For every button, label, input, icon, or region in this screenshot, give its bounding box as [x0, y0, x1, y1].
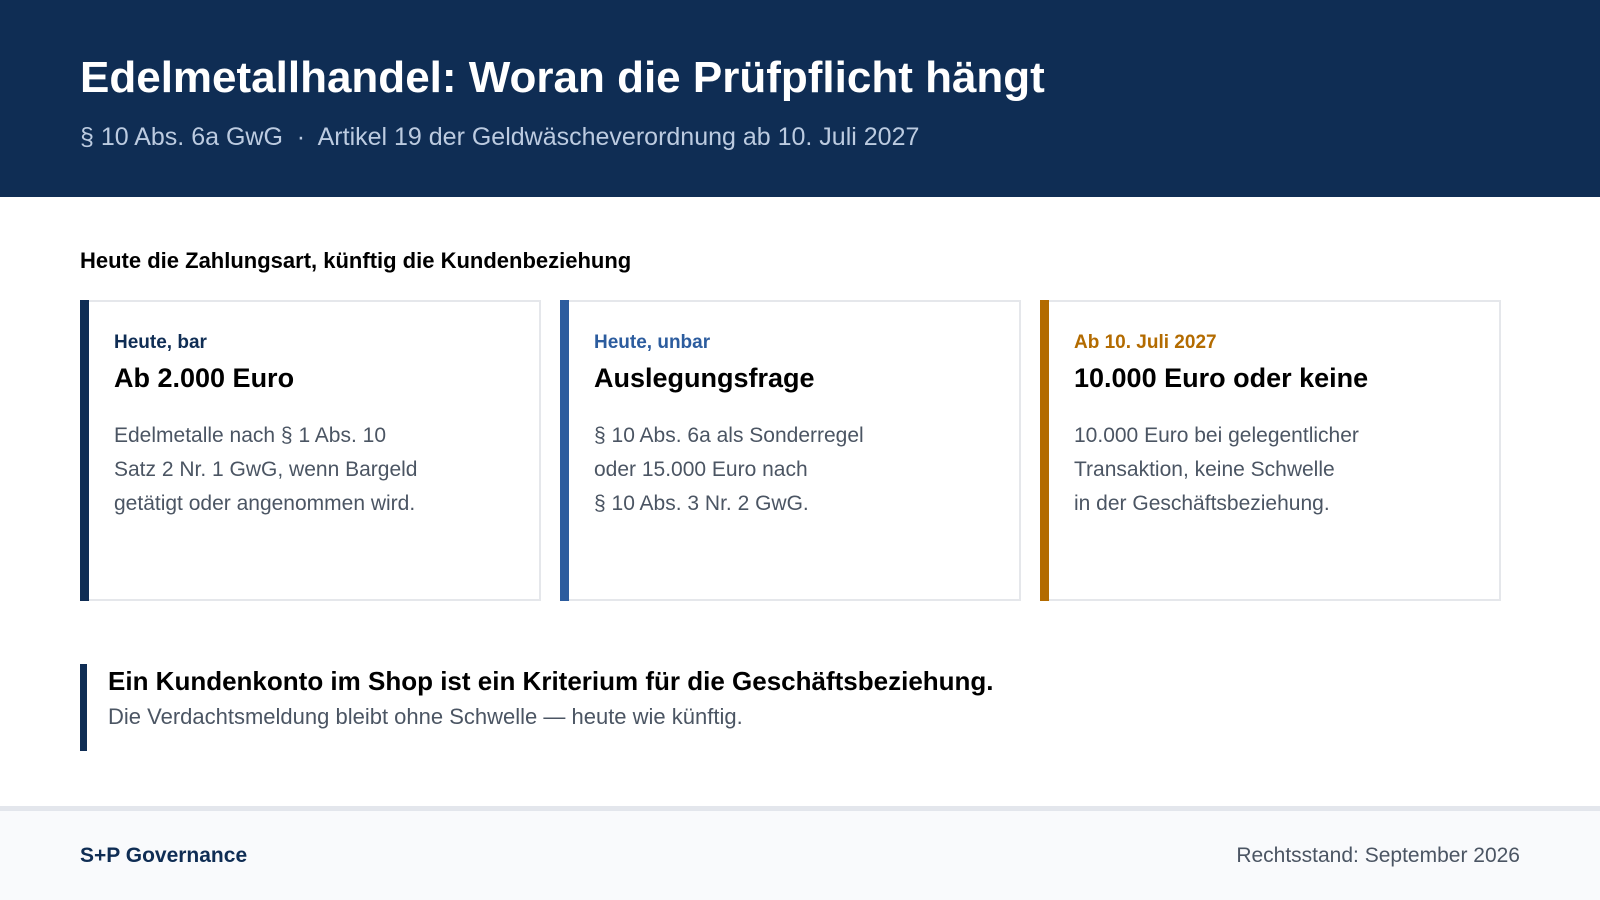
card body text: Satz 2 Nr. 1 GwG, wenn Bargeld: [114, 458, 417, 481]
card body text: getätigt oder angenommen wird.: [114, 492, 415, 515]
card body text: Edelmetalle nach § 1 Abs. 10: [114, 424, 386, 447]
header band: [0, 0, 1600, 197]
footer: [0, 806, 1600, 900]
card label: Heute, unbar: [594, 332, 710, 353]
card heading: 10.000 Euro oder keine: [1074, 363, 1368, 393]
card body text: [1074, 424, 1359, 515]
callout: [80, 664, 1500, 751]
subtitle: § 10 Abs. 6a GwG · Artikel 19 der Geldwäscheverordnung ab 10. Juli 2027: [80, 123, 919, 151]
accent bar: navy: [80, 300, 89, 601]
card body text: oder 15.000 Euro nach: [594, 458, 808, 481]
card body text: § 10 Abs. 6a als Sonderregel: [594, 424, 864, 447]
footer date: Rechtsstand: September 2026: [1236, 844, 1520, 867]
callout text: Die Verdachtsmeldung bleibt ohne Schwelle — heute wie künftig.: [108, 704, 743, 729]
callout heading: Ein Kundenkonto im Shop ist ein Kriterium für die Geschäftsbeziehung.: [108, 666, 994, 696]
title: Edelmetallhandel: Woran die Prüfpflicht hängt: [80, 53, 1045, 102]
card body text: in der Geschäftsbeziehung.: [1074, 492, 1330, 515]
card label: Heute, bar: [114, 332, 207, 353]
card heading: Ab 2.000 Euro: [114, 363, 294, 393]
card body text: [594, 424, 864, 515]
panel: heute unbar: [560, 300, 1021, 601]
footer brand: S+P Governance: [80, 844, 247, 867]
card heading: Auslegungsfrage: [594, 363, 815, 393]
panel: ab 10. Juli 2027: [1040, 300, 1501, 601]
accent bar: blue: [560, 300, 569, 601]
accent bar: amber: [1040, 300, 1049, 601]
card body text: § 10 Abs. 3 Nr. 2 GwG.: [594, 492, 809, 515]
card body text: 10.000 Euro bei gelegentlicher: [1074, 424, 1359, 447]
section heading: Heute die Zahlungsart, künftig die Kundenbeziehung: [80, 248, 631, 273]
card label: Ab 10. Juli 2027: [1074, 332, 1217, 353]
card body text: [114, 424, 417, 515]
panel: heute bar: [80, 300, 541, 601]
card body text: Transaktion, keine Schwelle: [1074, 458, 1335, 481]
